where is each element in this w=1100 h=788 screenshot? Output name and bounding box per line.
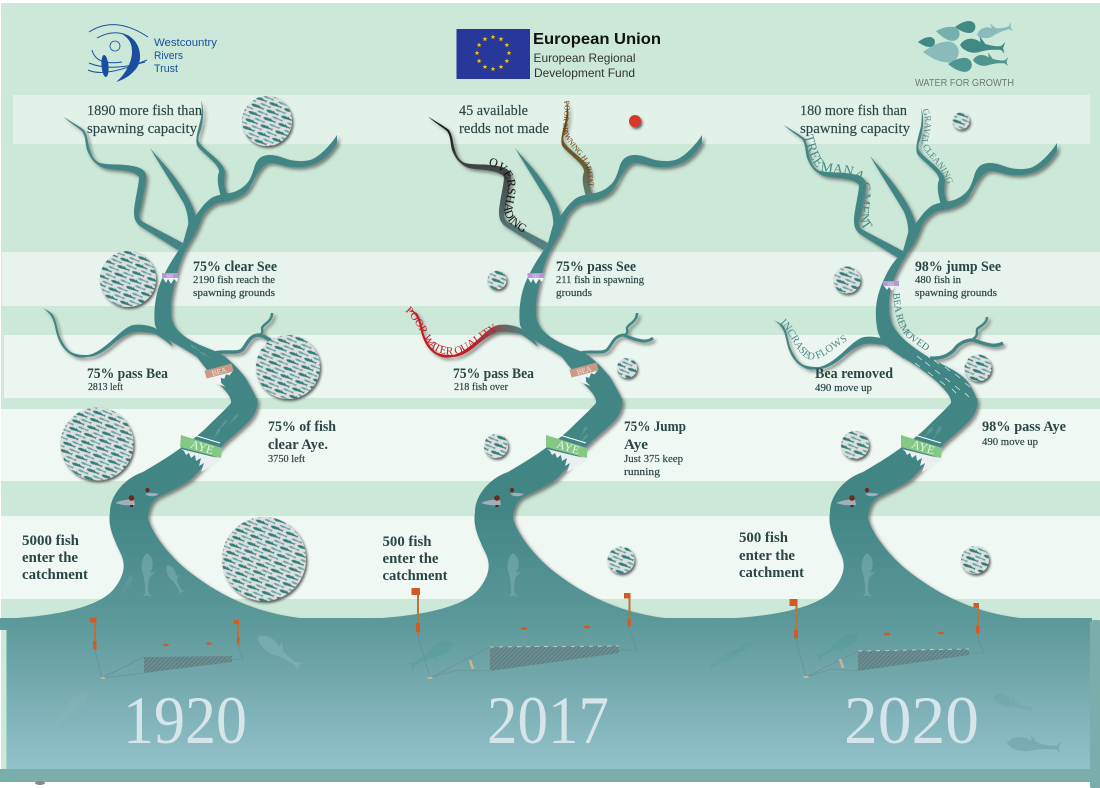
text: 1920 Aye: clear Aye. <box>268 437 328 453</box>
text: 1920 Bea: 2813 left <box>88 381 123 393</box>
text: 1920 See: 75% clear See <box>193 259 278 275</box>
text: 2020 spawning capacity: spawning capacity <box>800 121 911 137</box>
text: 2017 See: 75% pass See <box>556 259 637 275</box>
text: 2020 See: 98% jump See <box>915 259 1002 275</box>
text: 1920 Bea <box>87 366 169 393</box>
text: 2017 Bea: 75% pass Bea <box>453 366 535 382</box>
weir: See <box>528 273 544 284</box>
issue label: poor water quality: POOR WATER QUALITY <box>405 306 496 355</box>
EU text: European Regional <box>534 51 636 65</box>
fish circles 2017 <box>484 115 641 574</box>
year 1920: 1920 <box>123 682 247 758</box>
issue label: tree management: TREE MANAGMENT <box>804 134 873 229</box>
text: 2020 See: spawning grounds <box>915 287 997 299</box>
logo: Water for Growth <box>915 19 1014 89</box>
panel: 2017 <box>382 60 686 758</box>
text: 2020 catchment: enter the <box>739 548 796 564</box>
text: 2017 See: grounds <box>556 287 592 299</box>
text: 1920 Bea: 75% pass Bea <box>87 366 169 382</box>
text: 1920 spawning capacity: 1890 more fish than <box>87 103 203 119</box>
migrating fish 1920 <box>48 343 306 735</box>
weir: Aye <box>180 433 222 472</box>
text: 2017 Bea: 218 fish over <box>454 381 508 393</box>
text: 1920 catchment: 5000 fish <box>22 533 79 549</box>
river system 2020 <box>710 108 1095 619</box>
weir: Aye: AYE <box>555 437 581 457</box>
text: 2017 Bea <box>453 366 535 393</box>
weir: Bea <box>569 363 602 390</box>
weir: Bea <box>204 364 237 391</box>
icon: rivers trust emblem <box>88 25 148 82</box>
text: 2017 Aye: running <box>624 466 661 478</box>
logo text: WATER FOR GROWTH <box>915 78 1014 89</box>
river system 2017 <box>355 100 740 619</box>
text: 2017 redds: 45 available <box>459 103 528 119</box>
ducks 1920 <box>115 488 159 507</box>
weir: Aye: AYE <box>189 437 215 457</box>
text: 2017 See <box>556 259 644 299</box>
fish circles 2020 <box>834 112 992 574</box>
migrating fish 2017 <box>407 425 743 675</box>
text: 2020 See: 480 fish in <box>915 274 961 286</box>
logo: Westcountry Rivers Trust <box>88 25 218 82</box>
EU text: European Union <box>533 31 661 48</box>
issue label: poor spawning habitat: POOR SPAWNING HABITAT <box>562 100 594 187</box>
EU text <box>533 31 661 80</box>
text: 2020 Bea: 490 move up <box>815 382 872 394</box>
logo text: Rivers <box>154 50 183 62</box>
sea <box>0 618 1100 788</box>
river system 1920 <box>0 100 375 619</box>
text: 1920 catchment: enter the <box>22 550 79 566</box>
logo text: Westcountry <box>154 37 218 49</box>
weir: See <box>162 273 178 284</box>
text: 1920 catchment <box>22 533 88 583</box>
issue label: Bea removed: BEA REMOVED <box>893 292 929 350</box>
weir: Aye <box>546 433 588 472</box>
text: 2017 catchment: catchment <box>382 568 448 584</box>
text: 1920 See <box>193 259 278 299</box>
band: spawning capacity row <box>13 95 1090 144</box>
text: 2020 spawning capacity: 180 more fish than <box>800 103 908 119</box>
text: 2020 catchment <box>739 530 804 581</box>
migrating fish 2020 <box>729 425 1062 754</box>
fish circles 1920 <box>60 96 320 601</box>
text: 2017 catchment <box>382 534 448 584</box>
icon: drops and fish <box>918 19 1013 72</box>
logo text <box>154 37 218 75</box>
text: 1920 spawning capacity <box>87 103 203 137</box>
text: 2020 Bea <box>815 366 893 394</box>
text: 2017 redds: redds not made <box>459 121 549 137</box>
net 1920 <box>90 618 243 679</box>
icon: EU flag <box>456 29 530 79</box>
weir: Bea: BEA <box>576 364 593 377</box>
text: 2017 See: 211 fish in spawning <box>556 274 644 286</box>
weir: See: SEE <box>166 274 174 278</box>
year 2020: 2020 <box>844 682 979 758</box>
text: 2020 Aye: 490 move up <box>982 436 1038 448</box>
text: 2017 Aye: 75% Jump <box>624 419 686 435</box>
text: 2020 catchment: catchment <box>739 565 804 581</box>
net 2017 <box>412 588 637 679</box>
weir: See: SEE <box>532 274 540 278</box>
ducks 2020 <box>836 488 879 507</box>
text: 2020 spawning capacity <box>800 103 911 137</box>
weir: Bea: BEA <box>211 365 228 378</box>
text: 1920 Aye: 75% of fish <box>268 419 336 435</box>
text: 2020 Bea: Bea removed <box>815 366 893 382</box>
issue label: gravel cleaning: GRAVEL CLEANING <box>922 109 953 184</box>
text: 2017 catchment: 500 fish <box>382 534 432 550</box>
band: Aye weir row <box>1 409 1100 481</box>
text: 2017 catchment: enter the <box>382 551 439 567</box>
logo: European Union <box>456 29 661 80</box>
text: 2020 See <box>915 259 1002 299</box>
text: 1920 Aye: 3750 left <box>268 453 305 465</box>
text: 2020 catchment: 500 fish <box>739 530 788 546</box>
text: 2020 Aye: 98% pass Aye <box>982 419 1067 435</box>
text: 2017 redds <box>459 103 549 137</box>
band: See weir row <box>2 252 1100 306</box>
issue label: increased flows: INCRASED FLOWS <box>780 318 846 360</box>
logo text: Trust <box>154 63 178 75</box>
panel: 1920 <box>22 96 336 758</box>
weir: Aye: AYE <box>910 437 936 457</box>
text: 1920 Aye <box>268 419 336 465</box>
weir: See <box>883 281 899 291</box>
ducks 2017 <box>481 488 524 507</box>
text: 2017 Aye: Aye <box>624 437 649 453</box>
net 2020 <box>790 599 984 678</box>
weir: Aye <box>901 433 943 472</box>
text: 2017 Aye <box>624 419 686 478</box>
panel: 2020 <box>739 103 1067 758</box>
band: Bea weir row <box>4 335 1100 398</box>
text: 2020 Aye <box>982 419 1067 448</box>
text: 1920 See: spawning grounds <box>193 287 275 299</box>
issue label: overshading: OVERSHADING <box>490 158 527 232</box>
weir: See: SEE <box>887 282 895 286</box>
text: 1920 See: 2190 fish reach the <box>193 274 275 286</box>
text: 1920 catchment: catchment <box>22 567 88 583</box>
EU text: Development Fund <box>534 66 635 80</box>
text: 2017 Aye: Just 375 keep <box>624 453 683 465</box>
fish run dashes where Bea weir was removed <box>915 354 970 397</box>
band: catchment entry row <box>1 516 1100 599</box>
year 2017: 2017 <box>487 682 609 758</box>
text: 1920 spawning capacity: spawning capacity <box>87 121 198 137</box>
